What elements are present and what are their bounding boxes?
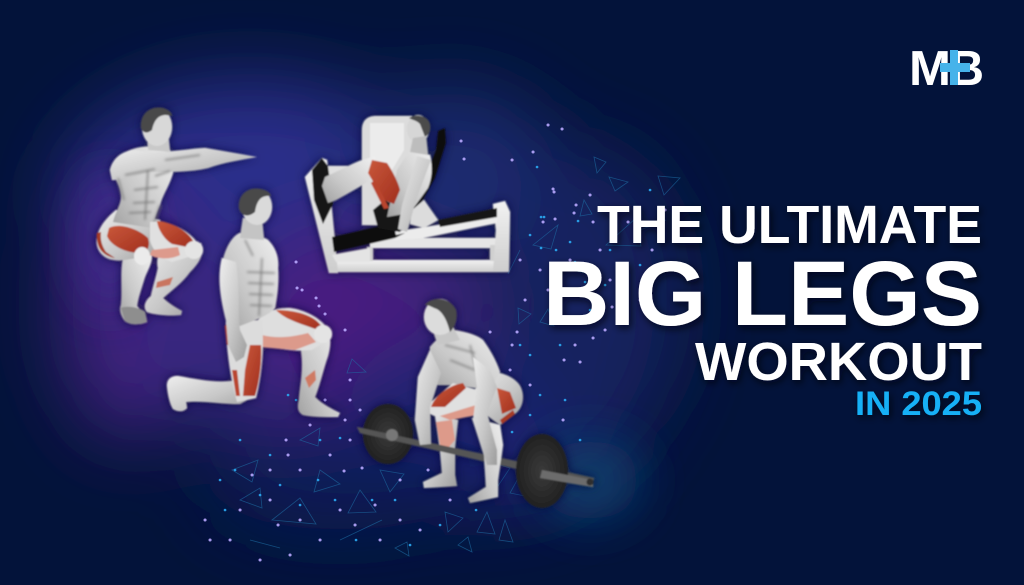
black foot pad — [312, 158, 333, 224]
seat back frame — [362, 116, 414, 225]
particle triangles — [232, 157, 680, 556]
front shin and foot — [298, 326, 340, 417]
logo: B — [950, 42, 984, 96]
title line 2: BIG LEGS — [543, 243, 982, 345]
thigh — [368, 160, 400, 204]
head — [407, 115, 429, 143]
exercise illustration: leg press machine — [305, 115, 510, 273]
right plate — [516, 434, 568, 508]
arm — [220, 258, 247, 362]
hair — [239, 189, 271, 215]
logo — [909, 42, 984, 96]
torso — [112, 147, 174, 228]
thigh — [422, 383, 478, 417]
back pad — [408, 128, 446, 220]
hair — [425, 299, 457, 332]
far thigh — [150, 222, 199, 262]
neck — [147, 130, 170, 152]
black rail — [438, 208, 497, 227]
left arm — [415, 350, 441, 445]
black seat — [373, 200, 410, 232]
lower leg — [322, 157, 375, 203]
muscle shading — [245, 240, 275, 316]
muscle shading — [118, 155, 200, 223]
exercise illustration: lunge — [167, 189, 340, 417]
exercise illustration: barbell sumo squat — [357, 299, 594, 508]
head — [142, 108, 172, 146]
muscle shading — [445, 345, 478, 375]
rear thigh — [226, 320, 263, 402]
hips — [470, 372, 523, 425]
neck — [410, 136, 428, 155]
knee — [314, 325, 332, 343]
far lower leg and foot — [145, 243, 202, 315]
near leg — [468, 418, 503, 503]
near thigh — [107, 226, 149, 253]
bar — [357, 427, 594, 486]
arms extended — [110, 148, 257, 180]
logo: M — [909, 42, 951, 96]
knees — [185, 241, 203, 259]
exercise illustration: front squat bodyweight — [97, 108, 257, 324]
particle dots: lilac — [205, 125, 684, 560]
black sled — [332, 223, 405, 252]
front thigh — [258, 308, 328, 351]
right post — [493, 201, 510, 272]
barbell left plate — [363, 404, 413, 464]
near lower leg — [120, 252, 152, 324]
foot plate frame — [305, 158, 338, 273]
torso — [222, 233, 278, 326]
hair — [141, 108, 172, 132]
machine base — [333, 260, 508, 272]
head — [242, 189, 272, 225]
white rail — [393, 216, 497, 240]
rear shin and foot — [167, 376, 254, 411]
title line 1: THE ULTIMATE — [597, 195, 982, 255]
torso — [387, 150, 432, 217]
hips — [97, 210, 165, 260]
neck — [240, 218, 264, 240]
title line 3: WORKOUT — [695, 332, 982, 392]
title line 4: IN 2025 — [855, 385, 982, 423]
hair — [409, 116, 430, 137]
title — [543, 195, 982, 423]
head — [424, 299, 456, 335]
support triangle — [410, 200, 438, 228]
particle dots: blue — [220, 167, 650, 545]
neck — [432, 325, 460, 345]
far leg — [423, 415, 458, 488]
near foot — [121, 307, 147, 324]
right arm — [473, 357, 497, 465]
arm — [398, 156, 431, 232]
torso — [430, 330, 500, 390]
